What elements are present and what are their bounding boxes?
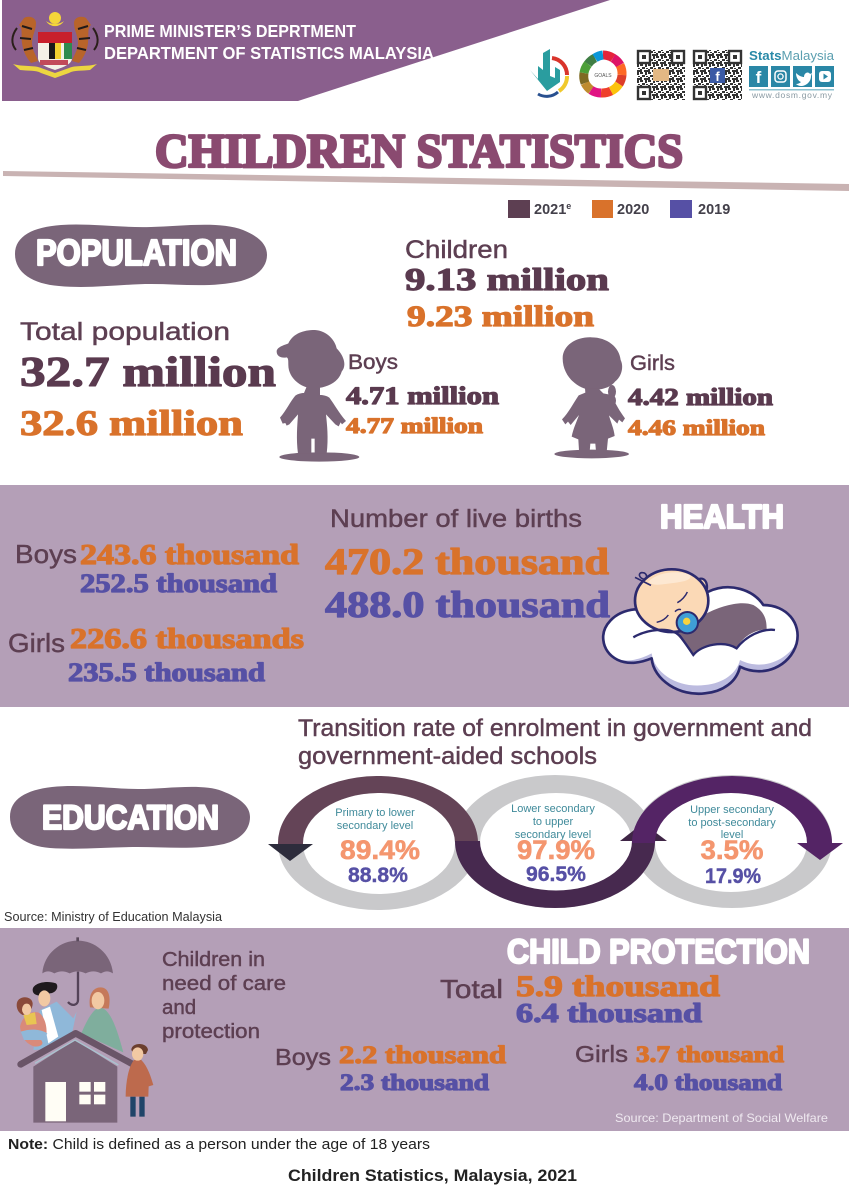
legend — [508, 200, 730, 218]
girls figures: Girls — [630, 352, 675, 375]
text: children in need: protection — [162, 1020, 260, 1043]
social media block: StatsMalaysia — [749, 49, 834, 63]
icon: coat of arms — [12, 12, 98, 78]
icon: SDG wheel — [584, 55, 622, 93]
arrow: primary to lower secondary — [278, 776, 478, 844]
total figures: 5.9 thousand — [516, 970, 720, 1003]
panel: population — [15, 225, 773, 462]
panel: child protection — [0, 928, 849, 1131]
girls births: Girls — [8, 628, 65, 658]
icon: statistics day logo — [530, 49, 567, 96]
girls figures: Girls — [575, 1041, 628, 1067]
ring text: primary to lower — [335, 807, 420, 887]
total population — [20, 318, 276, 443]
children totals — [405, 236, 609, 333]
ring text: upper to post — [688, 804, 776, 888]
total population: 32.7 million — [20, 350, 276, 396]
ring text: lower to upper — [511, 803, 595, 886]
girls figures: 4.46 million — [628, 415, 765, 440]
heading: health: HEALTH — [660, 498, 784, 535]
boys births: 243.6 thousand — [80, 540, 300, 571]
heading: education — [10, 786, 250, 849]
ring text: upper to post: 3.5% — [700, 835, 764, 865]
source: education: Source: Ministry of Education Malaysia — [4, 910, 222, 924]
icon: QR code 1 — [637, 50, 685, 100]
ring text: lower to upper: 96.5% — [526, 863, 586, 886]
ring text: lower to upper: to upper — [533, 816, 574, 828]
live births: 470.2 thousand — [325, 542, 610, 583]
boys figures: Boys — [275, 1044, 331, 1070]
live births — [325, 505, 611, 626]
boys figures: 4.77 million — [346, 413, 483, 438]
panel: health — [0, 485, 849, 707]
girls figures: 4.42 million — [628, 385, 773, 411]
boys births — [15, 539, 300, 598]
total population: 32.6 million — [20, 403, 243, 443]
text: children in need: and — [162, 996, 196, 1019]
legend: e — [566, 201, 571, 211]
icon: QR code 2: f — [715, 69, 720, 84]
arrow: upper to post-secondary — [632, 776, 832, 843]
text: children in need — [162, 948, 286, 1043]
girls births: 226.6 thousands — [70, 624, 304, 655]
heading: child protection: CHILD PROTECTION — [507, 933, 810, 971]
boys figures: 2.3 thousand — [340, 1070, 489, 1095]
ring text: lower to upper: secondary level — [515, 829, 591, 841]
girls figures — [575, 1041, 784, 1095]
icon: sleeping baby on cloud — [600, 569, 800, 703]
ring text: upper to post: 17.9% — [705, 865, 761, 888]
boys births: 252.5 thousand — [80, 569, 278, 598]
social media block: www.dosm.gov.my — [751, 90, 833, 100]
boys figures: 4.71 million — [346, 383, 499, 410]
ring text: lower to upper: Lower secondary — [511, 803, 595, 815]
children totals: 9.23 million — [407, 300, 594, 333]
heading: population: POPULATION — [36, 232, 237, 273]
text: children in need: Children in — [162, 948, 265, 971]
boys figures: Boys — [348, 351, 398, 374]
ring text: upper to post: Upper secondary — [690, 804, 774, 816]
girls figures — [628, 352, 773, 440]
children totals: Children — [405, 236, 508, 264]
ring text: upper to post: level — [721, 829, 743, 841]
chart: transition rings — [268, 775, 843, 910]
total figures: 6.4 thousand — [516, 998, 702, 1028]
legend: 2021 — [534, 202, 566, 218]
header banner — [2, 0, 610, 101]
note: Note: Child is defined as a person under the age of 18 years — [8, 1136, 430, 1153]
heading: transition rate: Transition rate of enrolment in government and — [298, 715, 812, 742]
children totals: 9.13 million — [405, 261, 609, 297]
girls births — [8, 624, 304, 687]
header text: PRIME MINISTER’S DEPRTMENT — [104, 21, 356, 41]
girls births: 235.5 thousand — [68, 658, 266, 687]
source: social welfare: Source: Department of Social Welfare — [615, 1111, 828, 1125]
social media block: f — [756, 68, 762, 87]
total figures: Total — [440, 974, 503, 1004]
ring text: primary to lower: secondary level — [337, 820, 413, 832]
footer: Children Statistics, Malaysia, 2021 — [288, 1167, 577, 1185]
total population: Total population — [20, 318, 230, 346]
ring text: primary to lower: 88.8% — [348, 864, 408, 887]
title: CHILDREN STATISTICS — [155, 125, 683, 178]
heading: population — [15, 225, 267, 287]
header text: DEPARTMENT OF STATISTICS MALAYSIA — [104, 43, 434, 63]
heading: transition rate — [298, 715, 812, 770]
ring text: primary to lower: Primary to lower — [335, 807, 415, 819]
icon: QR code 2 — [693, 50, 742, 100]
ring text: primary to lower: 89.4% — [340, 835, 420, 865]
legend: 2019 — [698, 202, 730, 218]
legend: 2020 — [617, 202, 649, 218]
girls figures: 4.0 thousand — [634, 1070, 782, 1095]
ring text: lower to upper: 97.9% — [517, 835, 595, 865]
boys figures: 2.2 thousand — [339, 1042, 506, 1069]
heading: transition rate: government-aided schools — [298, 743, 597, 770]
icon: boy silhouette — [277, 330, 359, 462]
arrow: lower to upper secondary — [455, 841, 655, 908]
ring text: upper to post: to post-secondary — [688, 817, 776, 829]
icon: girl silhouette — [554, 337, 629, 458]
title rule — [3, 171, 849, 191]
live births: Number of live births — [330, 505, 582, 533]
girls figures: 3.7 thousand — [636, 1042, 784, 1067]
heading: education: EDUCATION — [42, 799, 219, 837]
panel: education — [4, 715, 843, 924]
social media block — [749, 49, 834, 100]
boys figures — [346, 351, 499, 438]
boys births: Boys — [15, 539, 77, 569]
icon: family under umbrella with house — [17, 937, 153, 1123]
header text — [104, 21, 434, 63]
text: children in need: need of care — [162, 972, 286, 995]
live births: 488.0 thousand — [325, 585, 611, 626]
grey rings — [278, 775, 832, 910]
boys figures — [275, 1042, 506, 1095]
icon: SDG wheel: GOALS — [594, 73, 612, 79]
total figures — [440, 970, 720, 1028]
